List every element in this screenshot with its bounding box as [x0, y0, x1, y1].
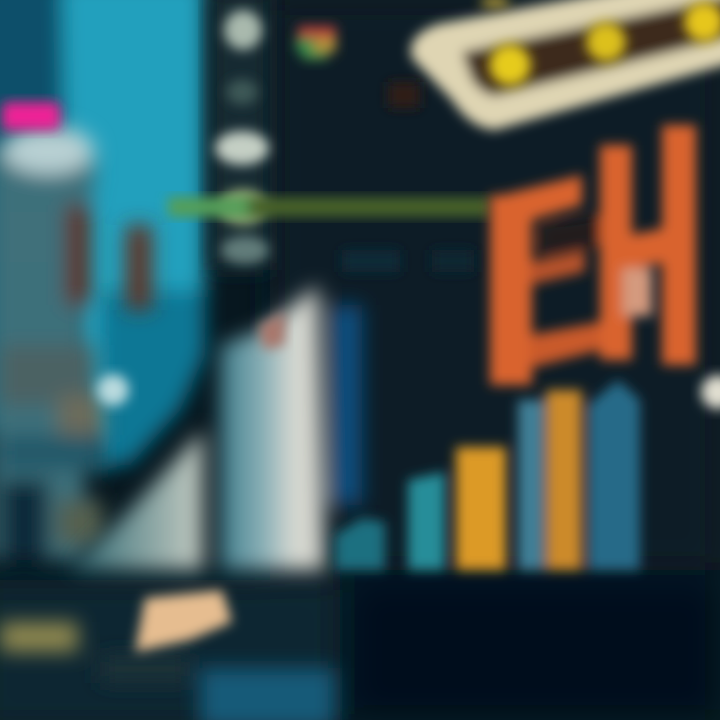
pale awning block: [135, 590, 232, 652]
neon green line: [168, 197, 490, 217]
white glow on tower: [97, 374, 129, 406]
left tower building: [0, 126, 152, 560]
pink neon cap: [2, 102, 60, 130]
street foreground: [0, 622, 335, 720]
panel: teal sky wall: [0, 0, 205, 470]
bulbs: [480, 0, 720, 86]
faint sign text glow: [342, 82, 474, 272]
chart: ascending coloured bars: [335, 380, 640, 570]
column: glowing lights: [210, 0, 270, 270]
lights: [215, 10, 269, 264]
tower pink accent: [258, 312, 285, 350]
icon: colourful small sign: [296, 26, 336, 60]
signboard with bulbs: [411, 0, 720, 130]
white glowing orb: [701, 375, 720, 409]
chart: pale skyline towers: [70, 285, 362, 570]
orange neon letters: [490, 125, 696, 385]
